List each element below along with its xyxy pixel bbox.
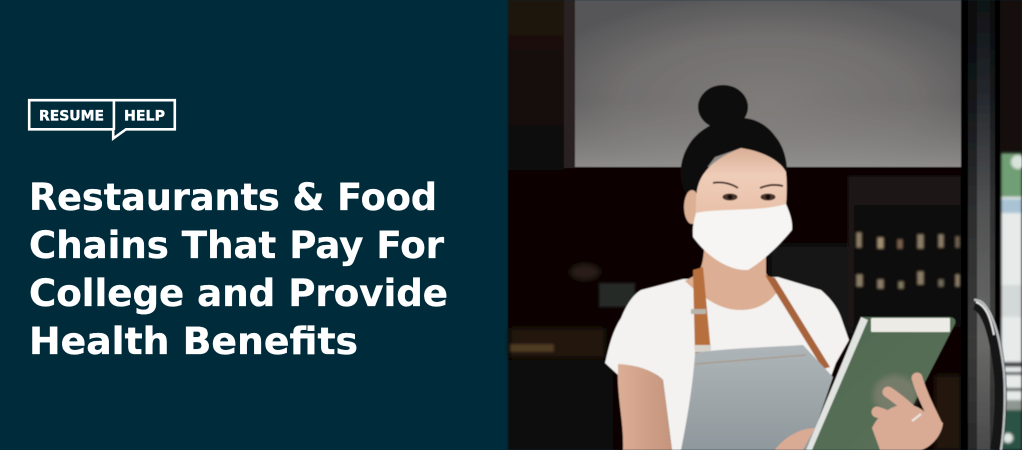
glass door frame and outside view <box>961 0 1022 450</box>
hand holding tablet <box>775 378 943 450</box>
face <box>696 148 787 240</box>
title: Restaurants & Food <box>29 176 437 219</box>
logo: Resume Help speech bubble: RESUME <box>39 108 104 124</box>
grey denim apron <box>681 345 833 450</box>
eyes <box>722 194 776 200</box>
eyebrows <box>713 182 783 188</box>
woman's arm <box>618 363 672 450</box>
title: Chains That Pay For <box>29 224 445 267</box>
title: College and Provide <box>29 272 448 315</box>
hair bun <box>698 85 748 129</box>
apron strap right <box>765 275 830 369</box>
apron strap left <box>691 267 711 353</box>
logo: Resume Help speech bubble <box>29 100 175 138</box>
photo: waitress with mask and tablet <box>508 0 1022 450</box>
logo: Resume Help speech bubble: HELP <box>124 108 165 124</box>
door handle <box>975 304 1001 450</box>
neck and chest <box>685 250 777 310</box>
white t-shirt <box>605 277 849 450</box>
wine bottles on shelf <box>856 232 960 289</box>
restaurant background <box>508 0 1022 450</box>
title <box>29 176 448 363</box>
left navy panel <box>0 0 508 450</box>
door handle highlight <box>974 300 1005 450</box>
ear <box>684 190 700 224</box>
tablet <box>806 317 955 450</box>
face mask <box>693 204 792 270</box>
title: Health Benefits <box>29 320 358 363</box>
hair <box>681 118 787 200</box>
